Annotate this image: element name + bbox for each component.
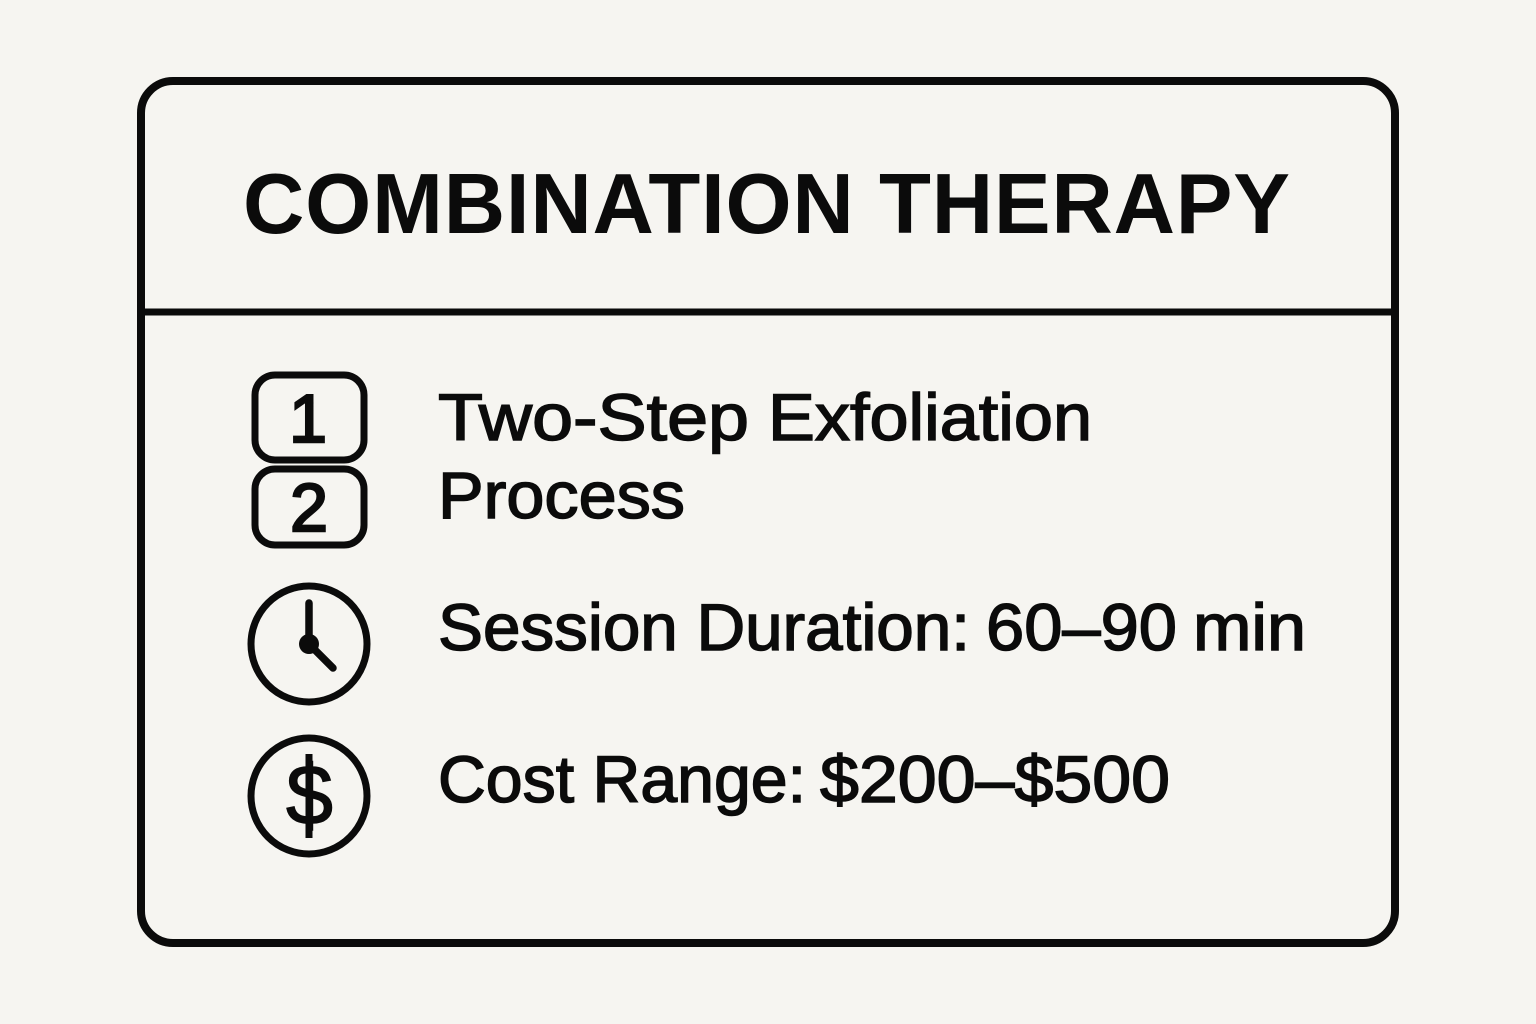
text: cost range: $200–$500 [820,742,1170,816]
text: session duration [438,590,1306,664]
icon: dollar coin: $ [286,748,333,842]
text: cost range: Cost Range: [438,742,806,816]
panel: combination therapy card [141,81,1395,943]
text: session duration: min [1193,590,1306,664]
text: two-step exfoliation process: Process [438,458,685,532]
text: session duration: Session Duration: [438,590,970,664]
text: two-step exfoliation process: Exfoliation [768,380,1092,454]
icon: numbered steps 1 and 2: 1 [289,381,327,457]
icon: numbered steps 1 and 2: 2 [290,470,328,546]
icon: dollar coin [251,738,367,854]
icon: clock [251,586,367,702]
text: cost range [438,742,1170,816]
text: two-step exfoliation process [438,380,1092,532]
icon: numbered steps 1 and 2 [255,375,364,546]
text: two-step exfoliation process: Two-Step [438,380,749,454]
title: COMBINATION THERAPY [243,157,1290,252]
text: session duration: 60–90 [986,590,1177,664]
